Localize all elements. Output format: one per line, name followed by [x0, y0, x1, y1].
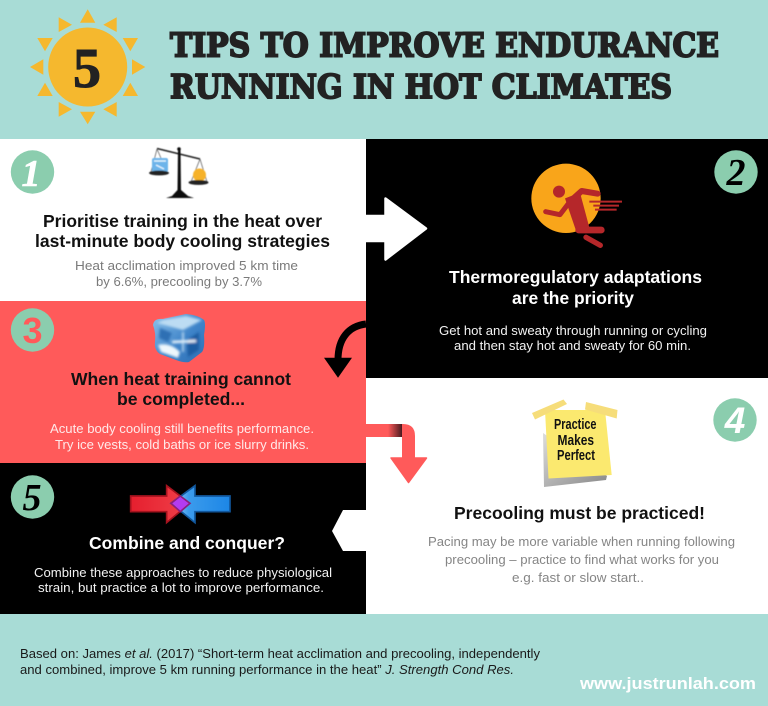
icon: sticky note: Makes	[558, 433, 594, 449]
badge: number 2	[714, 150, 758, 194]
text: source citation	[20, 647, 541, 677]
icon: balance scale with ice and sun	[149, 147, 208, 198]
arrow: white from tip 1 to tip 2	[366, 198, 426, 260]
icon: sticky note: Perfect	[557, 448, 595, 464]
badge: number 5: 5	[22, 477, 42, 519]
text: tip 3 body: Acute body cooling still benefits performance.	[50, 421, 314, 436]
heading: tip 3	[71, 369, 291, 409]
text: tip 5 body: strain, but practice a lot to improve performance.	[38, 580, 324, 595]
arrow: white from tip 4 to tip 5	[332, 510, 366, 551]
heading: tip 1: Prioritise training in the heat over	[43, 211, 322, 231]
heading: tip 2: Thermoregulatory adaptations	[449, 267, 702, 287]
text: tip 3 body: Try ice vests, cold baths or ice slurry drinks.	[55, 437, 309, 452]
badge: number 3: 3	[22, 310, 43, 351]
heading: tip 2	[449, 267, 702, 308]
text: tip 3 body	[50, 421, 314, 452]
text: tip 1 body: Heat acclimation improved 5 km time	[75, 258, 298, 273]
icon: sun with number 5: 5	[73, 38, 101, 100]
badge: number 3	[11, 308, 54, 352]
panel: tip 4	[366, 378, 768, 614]
heading: tip 2: are the priority	[512, 288, 634, 308]
arrow: red from tip 3 to tip 4	[366, 424, 426, 482]
icon: runner in front of sun	[531, 164, 622, 245]
text: source citation: Based on: James et al. (2017) “Short-term heat acclimation and precooling, independently	[20, 647, 541, 661]
heading: tip 3: be completed...	[117, 389, 245, 409]
footer background	[0, 614, 768, 706]
text: tip 2 body: and then stay hot and sweaty for 60 min.	[454, 338, 691, 353]
text: tip 4 body: Pacing may be more variable when running following	[428, 534, 735, 549]
badge: number 1: 1	[22, 153, 40, 195]
text: tip 5 body: Combine these approaches to reduce physiological	[34, 565, 332, 580]
text: tip 2 body: Get hot and sweaty through running or cycling	[439, 323, 707, 338]
heading: tip 3: When heat training cannot	[71, 369, 291, 389]
title: TIPS TO IMPROVE ENDURANCE	[170, 26, 719, 64]
panel: tip 5	[0, 463, 366, 614]
icon: two converging arrows	[131, 486, 230, 523]
badge: number 2: 2	[726, 152, 746, 194]
badge: number 4	[713, 398, 757, 442]
text: tip 5 body	[34, 565, 332, 595]
title	[170, 26, 719, 106]
icon: sticky note: Practice	[554, 417, 596, 433]
text: tip 1 body: by 6.6%, precooling by 3.7%	[96, 274, 262, 289]
panel: tip 1	[0, 139, 366, 301]
badge: number 5	[11, 475, 54, 519]
panel: tip 2	[366, 139, 768, 378]
heading: tip 4: Precooling must be practiced!	[454, 503, 705, 523]
heading: tip 5: Combine and conquer?	[89, 533, 285, 553]
text: tip 4 body	[428, 534, 735, 585]
badge: number 1	[11, 150, 54, 195]
text: tip 2 body	[439, 323, 707, 353]
panel: tip 3	[0, 301, 366, 463]
arrow: black curved from tip 2 to tip 3	[324, 324, 366, 378]
icon: sticky note	[532, 400, 618, 487]
text: tip 1 body	[75, 258, 298, 289]
text: source citation: and combined, improve 5 km running performance in the heat” J. Strength Cond Res.	[20, 663, 514, 677]
text: tip 4 body: e.g. fast or slow start..	[512, 570, 644, 585]
badge: number 4: 4	[724, 400, 745, 441]
text: tip 4 body: precooling – practice to find what works for you	[445, 552, 719, 567]
text: website: www.justrunlah.com	[579, 674, 756, 693]
heading: tip 1	[35, 211, 330, 251]
heading: tip 1: last-minute body cooling strategies	[35, 231, 330, 251]
icon: ice cube	[153, 314, 205, 362]
header background	[0, 0, 768, 139]
title: RUNNING IN HOT CLIMATES	[170, 67, 672, 106]
icon: sun with number 5	[30, 9, 145, 124]
